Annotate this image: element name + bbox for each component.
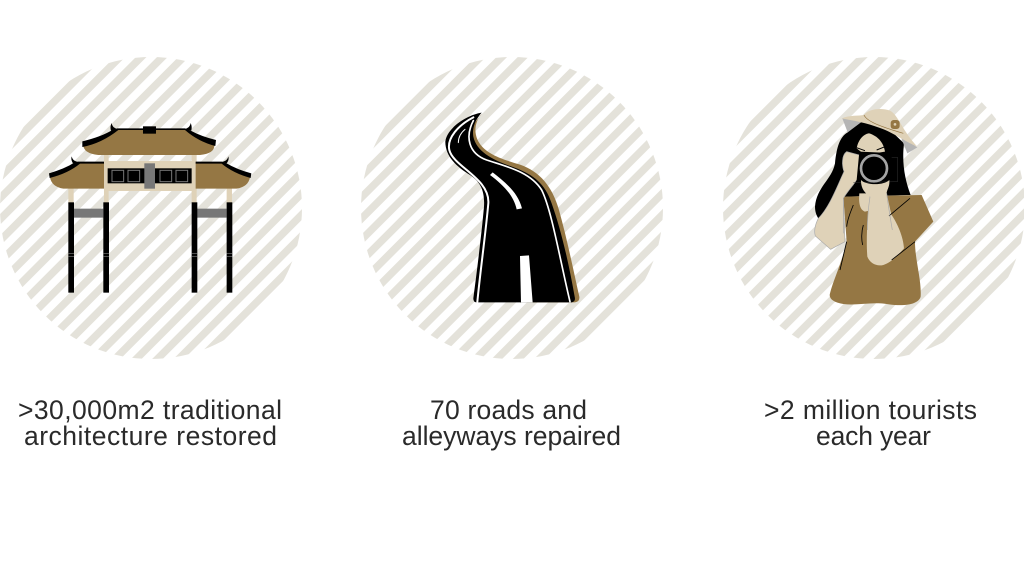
left arm — [815, 152, 861, 249]
panel: roads repaired — [361, 57, 663, 451]
panel: restored architecture — [0, 57, 302, 451]
striped circle background: tourist — [723, 57, 1024, 359]
icon: winding road — [445, 113, 579, 302]
shirt fold lines — [840, 198, 915, 270]
face — [857, 133, 885, 155]
caption: architecture: architecture restored — [24, 421, 277, 451]
icon: traditional gate — [49, 123, 251, 293]
shirt — [830, 195, 933, 305]
caption: tourists: each year — [816, 421, 931, 451]
caption: tourists: >2 million tourists — [764, 395, 977, 425]
hair — [815, 120, 911, 218]
panel: tourists — [723, 57, 1024, 451]
lens — [861, 155, 887, 181]
icon: tourist with camera — [815, 109, 933, 305]
hat — [842, 118, 917, 153]
striped circle background: road — [361, 57, 663, 359]
camera body — [849, 152, 898, 193]
caption: roads: alleyways repaired — [402, 421, 621, 451]
caption: roads: 70 roads and — [430, 395, 587, 425]
caption: architecture: >30,000m2 traditional — [18, 395, 282, 425]
striped circle background: gate — [0, 57, 302, 359]
forearm and hand — [861, 180, 904, 265]
